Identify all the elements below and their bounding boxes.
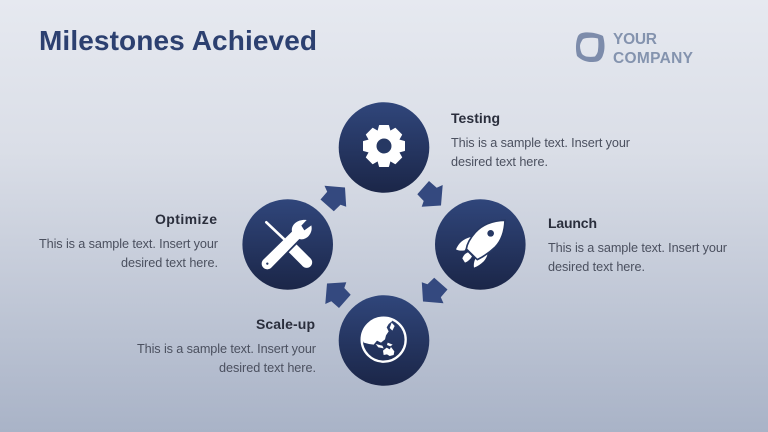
text block: scale-up: Scale-up bbox=[256, 316, 315, 332]
company logo bbox=[576, 31, 694, 67]
arrow: launch to scale-up bbox=[422, 278, 448, 303]
icon: gear bbox=[364, 126, 404, 166]
circle: optimize bbox=[242, 199, 333, 290]
text block: scale-up: This is a sample text. Insert your bbox=[137, 342, 317, 356]
circle: launch bbox=[435, 199, 526, 290]
text block: testing: This is a sample text. Insert your bbox=[451, 136, 631, 150]
arrow: testing to launch bbox=[417, 181, 443, 207]
icon: globe bbox=[362, 318, 406, 362]
title: Milestones Achieved bbox=[39, 25, 317, 56]
text block: launch bbox=[548, 215, 728, 274]
icon: tools bbox=[262, 220, 312, 269]
text block: optimize: desired text here. bbox=[121, 256, 218, 270]
company logo: COMPANY bbox=[613, 50, 694, 67]
logo mark bbox=[576, 32, 604, 62]
text block: launch: desired text here. bbox=[548, 260, 645, 274]
text block: optimize: This is a sample text. Insert your bbox=[39, 237, 219, 251]
logo text: YOUR bbox=[613, 31, 657, 48]
text block: optimize bbox=[39, 211, 219, 270]
text block: testing: desired text here. bbox=[451, 155, 548, 169]
circle: testing bbox=[339, 102, 429, 193]
arrow: optimize to testing bbox=[320, 186, 346, 211]
arrow: scale-up to optimize bbox=[325, 282, 351, 308]
circle: scale-up bbox=[339, 295, 429, 386]
text block: testing: Testing bbox=[451, 110, 500, 126]
icon: rocket bbox=[456, 220, 505, 268]
text block: optimize: Optimize bbox=[155, 211, 217, 227]
text block: launch: This is a sample text. Insert your bbox=[548, 241, 728, 255]
text block: scale-up: desired text here. bbox=[219, 361, 316, 375]
text block: scale-up bbox=[137, 316, 317, 375]
text block: testing bbox=[451, 110, 631, 169]
text block: launch: Launch bbox=[548, 215, 597, 231]
